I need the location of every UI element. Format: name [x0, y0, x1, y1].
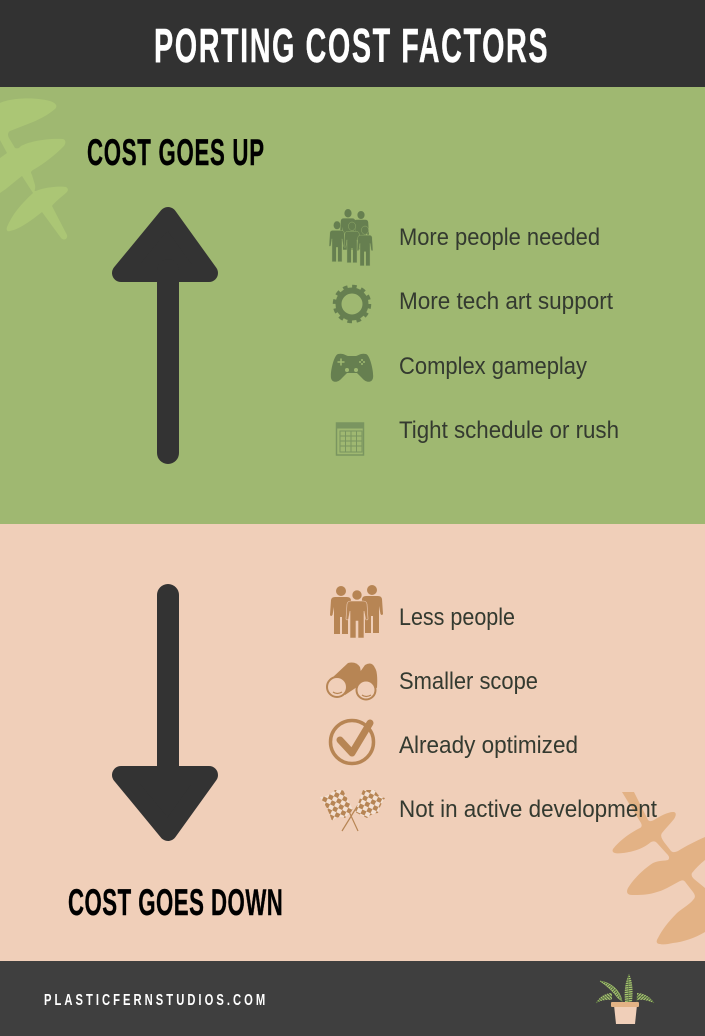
- icon: gamepad: [331, 354, 373, 382]
- icon: check mark in circle: [330, 720, 374, 764]
- decorative leaf: bottom right: [613, 792, 705, 944]
- decorative leaf: top left: [0, 98, 68, 239]
- item: more people needed: [329, 209, 600, 266]
- label: Smaller scope: [399, 668, 538, 695]
- header bar: [0, 0, 705, 87]
- item: less people: [330, 585, 515, 638]
- label: More people needed: [399, 224, 600, 251]
- icon: binoculars: [327, 662, 377, 700]
- heading: cost goes up: COST GOES UP: [87, 132, 264, 173]
- panel: cost goes up: [0, 87, 705, 524]
- item: not in active development: [320, 790, 657, 831]
- icon: three people: [330, 585, 383, 638]
- item: already optimized: [330, 720, 578, 764]
- item: tight schedule or rush: [336, 417, 619, 455]
- label: Not in active development: [399, 796, 657, 823]
- icon: gear: [335, 287, 369, 321]
- icon: potted fern: [596, 974, 654, 1024]
- arrow: down: [121, 595, 209, 832]
- label: Less people: [399, 604, 515, 631]
- icon: checkered flags: [320, 790, 385, 831]
- label: Already optimized: [399, 732, 578, 759]
- footer website text: PLASTICFERNSTUDIOS.COM: [44, 990, 265, 1008]
- icon: calendar: [336, 423, 364, 455]
- footer bar: [0, 961, 705, 1036]
- label: Tight schedule or rush: [399, 417, 619, 444]
- item: complex gameplay: [331, 353, 587, 382]
- item: smaller scope: [327, 662, 538, 700]
- label: Complex gameplay: [399, 353, 587, 380]
- icon: group of people: [329, 209, 373, 266]
- arrow: up: [121, 216, 209, 453]
- title: PORTING COST FACTORS: [154, 20, 548, 73]
- item: more tech art support: [335, 287, 613, 321]
- label: More tech art support: [399, 288, 613, 315]
- panel: cost goes down: [0, 524, 705, 961]
- heading: cost goes down: COST GOES DOWN: [68, 882, 283, 923]
